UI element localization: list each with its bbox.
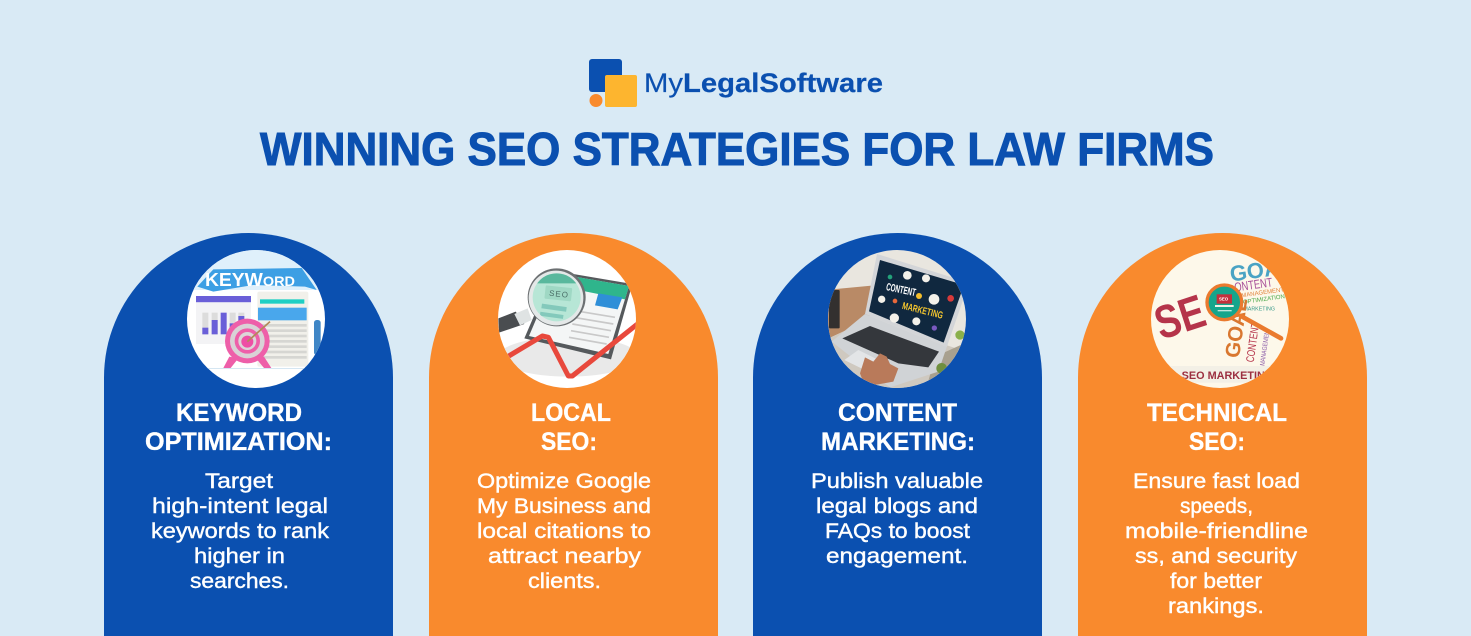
- description: [1125, 470, 1308, 618]
- description: Optimize Google: [477, 470, 651, 493]
- heading: LOCAL: [531, 399, 611, 427]
- panel: local seo: [429, 233, 718, 636]
- panel: content marketing: [753, 233, 1042, 636]
- description: ss, and security: [1135, 545, 1298, 568]
- description: [477, 470, 651, 593]
- description: Publish valuable: [811, 470, 983, 493]
- icon: seo word cloud and magnifier: ONTENT: [1233, 275, 1274, 295]
- card background: [753, 233, 1042, 636]
- description: Ensure fast load: [1133, 470, 1300, 493]
- description: My Business and: [477, 495, 651, 518]
- description: attract nearby: [488, 545, 642, 568]
- heading: TECHNICAL: [1147, 399, 1287, 427]
- heading: SEO:: [541, 428, 597, 456]
- icon: keyword target illustration: [187, 250, 325, 388]
- description: [811, 470, 983, 568]
- description: local citations to: [477, 520, 651, 543]
- icon: seo word cloud and magnifier: [1151, 250, 1289, 388]
- icon: seo word cloud and magnifier: GOAL: [1221, 297, 1252, 359]
- icon: seo word cloud and magnifier: CONTENT: [1245, 322, 1262, 363]
- description: high-intent legal: [152, 495, 328, 518]
- icon: seo word cloud and magnifier: GOAL: [1228, 253, 1295, 287]
- icon: keyword target illustration: KEYWORD: [205, 269, 295, 290]
- heading: [1147, 399, 1287, 456]
- icon: seo magnifier and graph: [498, 250, 636, 388]
- panel: keyword optimization: [104, 233, 393, 636]
- icon: seo word cloud and magnifier: MANAGEMENT: [1241, 287, 1285, 299]
- title: WINNING SEO STRATEGIES FOR LAW FIRMS: [260, 123, 1214, 175]
- icon: seo word cloud and magnifier: MARKETING: [1243, 307, 1275, 313]
- icon: seo word cloud and magnifier: OPTIMIZATION: [1243, 294, 1285, 306]
- description: clients.: [528, 570, 601, 593]
- icon: seo word cloud and magnifier: SE: [1148, 285, 1212, 350]
- card background: [1078, 233, 1367, 636]
- icon: laptop with content marketing: CONTENT: [885, 281, 917, 299]
- heading: [145, 399, 332, 456]
- heading: OPTIMIZATION:: [145, 428, 332, 456]
- description: higher in: [194, 545, 285, 568]
- icon: laptop with content marketing: MARKETING: [901, 301, 944, 322]
- description: mobile-friendline: [1125, 520, 1308, 543]
- description: [151, 470, 330, 593]
- description: rankings.: [1168, 595, 1264, 618]
- description: keywords to rank: [151, 520, 330, 543]
- heading: [531, 399, 611, 456]
- heading: CONTENT: [838, 399, 957, 427]
- heading: SEO:: [1189, 428, 1245, 456]
- heading: MARKETING:: [821, 428, 975, 456]
- icon: laptop with content marketing: [828, 250, 966, 388]
- description: speeds,: [1180, 495, 1253, 518]
- icon: seo magnifier and graph: SEO: [549, 289, 569, 300]
- heading: [821, 399, 975, 456]
- description: engagement.: [826, 545, 968, 568]
- description: legal blogs and: [816, 495, 978, 518]
- icon: seo word cloud and magnifier: SEO: [1219, 297, 1229, 302]
- card background: [429, 233, 718, 636]
- heading: KEYWORD: [176, 399, 302, 427]
- logo: [589, 59, 883, 107]
- logo mark: [589, 59, 637, 107]
- description: FAQs to boost: [825, 520, 970, 543]
- panel: technical seo: [1078, 233, 1367, 636]
- description: searches.: [190, 570, 289, 593]
- icon: seo word cloud and magnifier: MANAGEMENT: [1259, 327, 1272, 366]
- logo wordmark: MyLegalSoftware: [644, 68, 883, 98]
- description: for better: [1170, 570, 1262, 593]
- description: Target: [205, 470, 273, 493]
- card background: [104, 233, 393, 636]
- icon: seo word cloud and magnifier: SEO MARKETING: [1182, 370, 1274, 382]
